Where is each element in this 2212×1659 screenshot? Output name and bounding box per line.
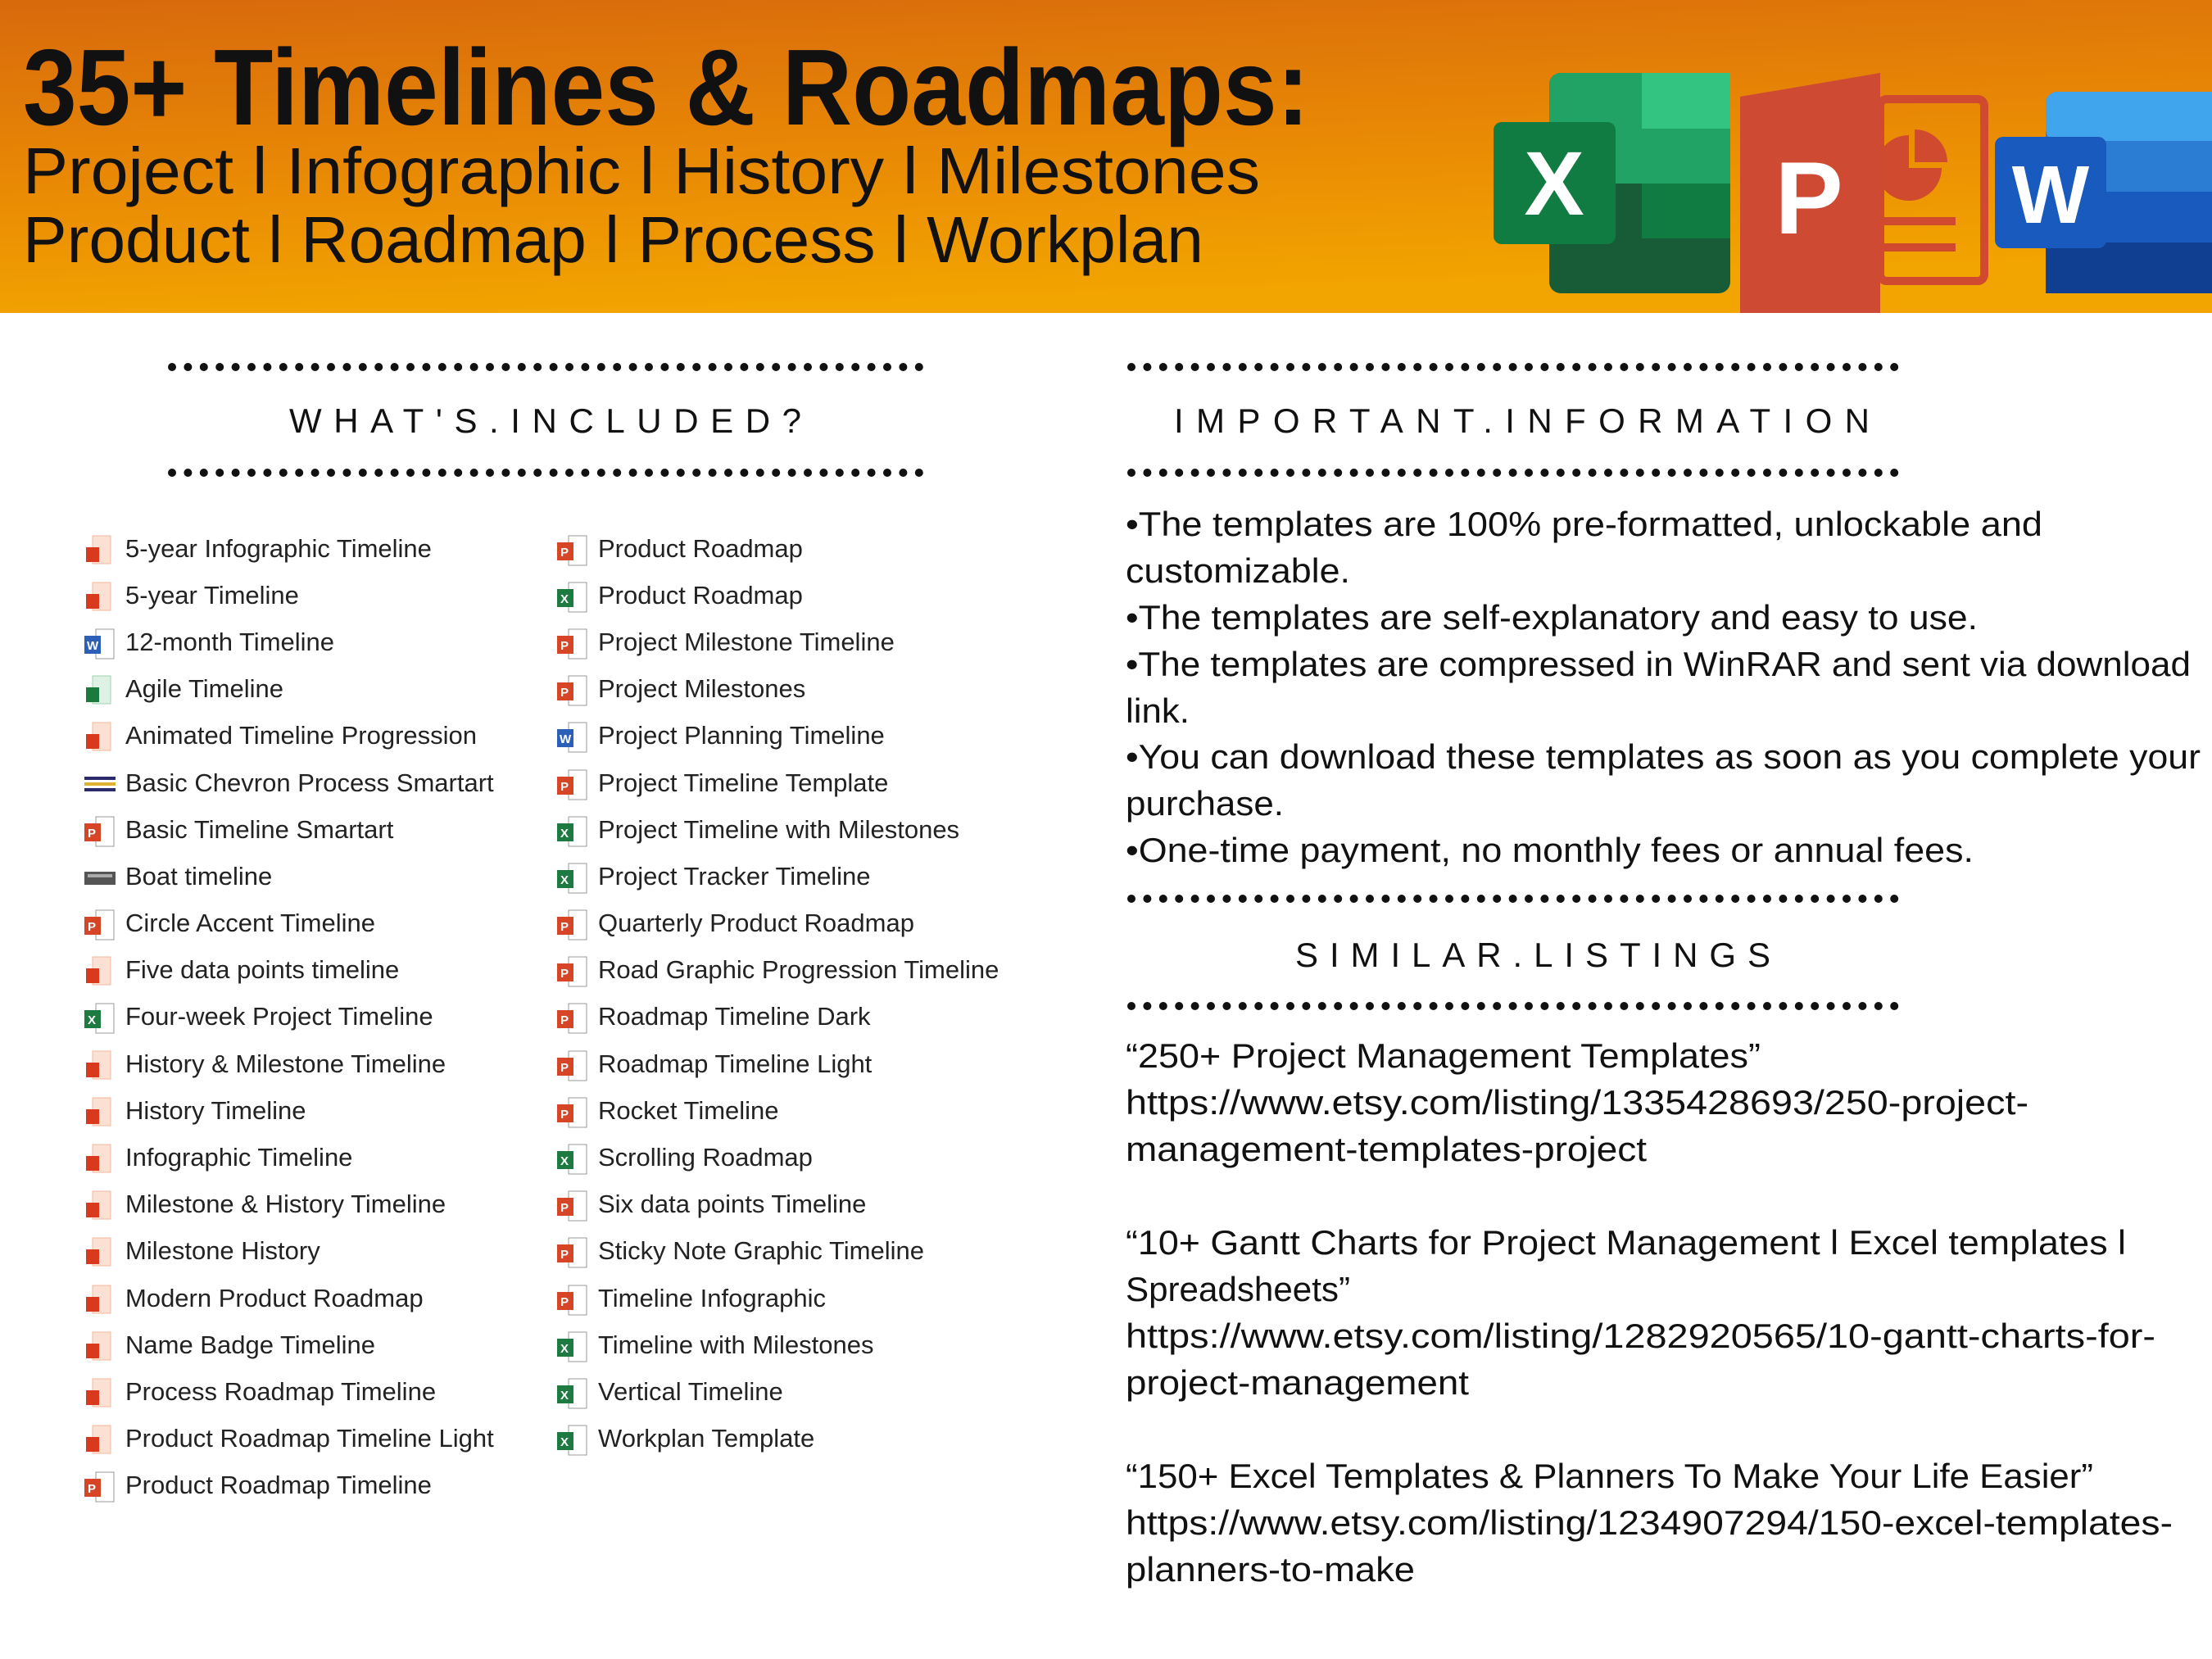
text block: similar listings: “250+ Project Management Templates” [1126,1036,1761,1075]
list: included templates left column: Boat timeline [125,862,272,891]
list: included templates right column: Vertical Timeline [598,1377,783,1406]
list: included templates right column: Six data points Timeline [598,1190,866,1218]
list: included templates right column: P [560,780,569,794]
list: included templates left column: Basic Chevron Process Smartart [125,768,494,797]
list: included templates right column: X [560,827,569,841]
text block: important information: •The templates are compressed in WinRAR and sent via download [1126,645,2191,683]
list: included templates left column: Product Roadmap Timeline [125,1471,432,1499]
list: included templates right column: X [560,1435,569,1449]
list: included templates left column: Animated Timeline Progression [125,721,477,750]
list: included templates right column: Roadmap Timeline Light [598,1049,873,1078]
list: included templates right column: Product Roadmap [598,534,803,563]
list: included templates left column: X [88,1013,96,1027]
list: included templates right column: Project Tracker Timeline [598,862,870,891]
list: included templates right column: W [560,732,572,746]
list: included templates left column: History Timeline [125,1096,306,1125]
text block: important information: •The templates are self-explanatory and easy to use. [1126,598,1978,637]
list: included templates right column: Project Timeline with Milestones [598,815,959,844]
list: included templates left column: Circle Accent Timeline [125,909,375,937]
list: included templates left column: Infographic Timeline [125,1143,352,1172]
list: included templates right column: Project Milestones [598,674,805,703]
heading: what's included: WHAT'S.INCLUDED? [289,401,801,440]
text block: similar listings: planners-to-make [1126,1550,1415,1589]
list: included templates left column [84,534,494,1502]
list: included templates right column: X [560,1154,569,1168]
list: included templates right column: X [560,873,569,887]
list: included templates right column: Roadmap Timeline Dark [598,1002,871,1031]
text block: similar listings: “10+ Gantt Charts for Project Management l Excel templates l [1126,1223,2126,1262]
list: included templates left column: P [88,1482,96,1496]
list: included templates right column: Project Planning Timeline [598,721,885,750]
text block: similar listings: project-management [1126,1363,1469,1402]
heading: similar listings: SIMILAR.LISTINGS [1295,936,1770,974]
list: included templates right column: Scrolling Roadmap [598,1143,813,1172]
icon: word: W [2012,149,2090,241]
list: included templates left column: Milestone & History Timeline [125,1190,446,1218]
list: included templates right column: X [560,592,569,606]
subtitle line 2: Product l Roadmap l Process l Workplan [23,203,1203,276]
text block: important information: •The templates are 100% pre-formatted, unlockable and [1126,505,2042,543]
icon: excel [1494,73,1730,293]
text block: similar listings: https://www.etsy.com/listing/1234907294/150-excel-templates- [1126,1503,2173,1542]
list: included templates right column: Workplan Template [598,1424,814,1453]
list: included templates left column: W [87,639,99,653]
icon: word [1995,92,2212,293]
list: included templates left column: P [88,827,96,841]
list: included templates left column: Basic Timeline Smartart [125,815,394,844]
list: included templates right column: P [560,1108,569,1122]
list: included templates left column: 12-month Timeline [125,628,334,656]
list: included templates right column: X [560,1342,569,1356]
text block: important information: •You can download these templates as soon as you complete your [1126,737,2201,776]
list: included templates right column: P [560,1248,569,1262]
icon: powerpoint [1740,73,1984,313]
list: included templates right column: P [560,686,569,700]
text block: important information: purchase. [1126,784,1284,823]
list: included templates right column: X [560,1389,569,1403]
list: included templates right column: Product Roadmap [598,581,803,610]
list: included templates left column: Product Roadmap Timeline Light [125,1424,494,1453]
list: included templates right column: P [560,967,569,981]
list: included templates right column: P [560,1013,569,1027]
text block: similar listings: Spreadsheets” [1126,1270,1350,1308]
icon: excel: X [1524,134,1584,234]
list: included templates right column: Project Timeline Template [598,768,888,797]
text block: similar listings [1126,1036,2173,1589]
list: included templates right column: P [560,1061,569,1075]
list: included templates right column: Sticky Note Graphic Timeline [598,1236,924,1265]
list: included templates right column: P [560,546,569,560]
header band [0,0,2212,313]
text block: important information: link. [1126,691,1190,730]
heading: important information: IMPORTANT.INFORMATION [1174,401,1870,440]
list: included templates left column: P [88,920,96,934]
list: included templates left column: Name Badge Timeline [125,1330,375,1359]
list: included templates left column: History & Milestone Timeline [125,1049,446,1078]
title: 35+ Timelines & Roadmaps: [23,27,1309,147]
subtitle line 1: Project l Infographic l History l Milestones [23,134,1260,207]
text block: similar listings: https://www.etsy.com/listing/1282920565/10-gantt-charts-for- [1126,1317,2155,1355]
list: included templates left column: Four-week Project Timeline [125,1002,433,1031]
list: included templates right column: Timeline with Milestones [598,1330,874,1359]
list: included templates left column: 5-year Infographic Timeline [125,534,432,563]
list: included templates right column [557,534,999,1455]
list: included templates right column: Timeline Infographic [598,1284,826,1312]
list: included templates left column: Process Roadmap Timeline [125,1377,436,1406]
text block: important information: customizable. [1126,551,1350,590]
list: included templates right column: P [560,920,569,934]
list: included templates left column: Milestone History [125,1236,320,1265]
text block: similar listings: management-templates-project [1126,1130,1647,1168]
icon: powerpoint: P [1775,142,1843,256]
list: included templates right column: P [560,1201,569,1215]
list: included templates left column: Agile Timeline [125,674,283,703]
list: included templates right column: Rocket Timeline [598,1096,779,1125]
list: included templates right column: P [560,1295,569,1309]
text block: similar listings: https://www.etsy.com/listing/1335428693/250-project- [1126,1083,2028,1122]
list: included templates right column: P [560,639,569,653]
list: included templates left column: 5-year Timeline [125,581,299,610]
list: included templates left column: Five data points timeline [125,955,399,984]
text block: similar listings: “150+ Excel Templates & Planners To Make Your Life Easier” [1126,1457,2093,1495]
list: included templates right column: Road Graphic Progression Timeline [598,955,999,984]
list: included templates left column: Modern Product Roadmap [125,1284,424,1312]
list: included templates right column: Quarterly Product Roadmap [598,909,914,937]
text block: important information: •One-time payment, no monthly fees or annual fees. [1126,831,1974,869]
list: included templates right column: Project Milestone Timeline [598,628,895,656]
text block: important information [1126,505,2201,869]
